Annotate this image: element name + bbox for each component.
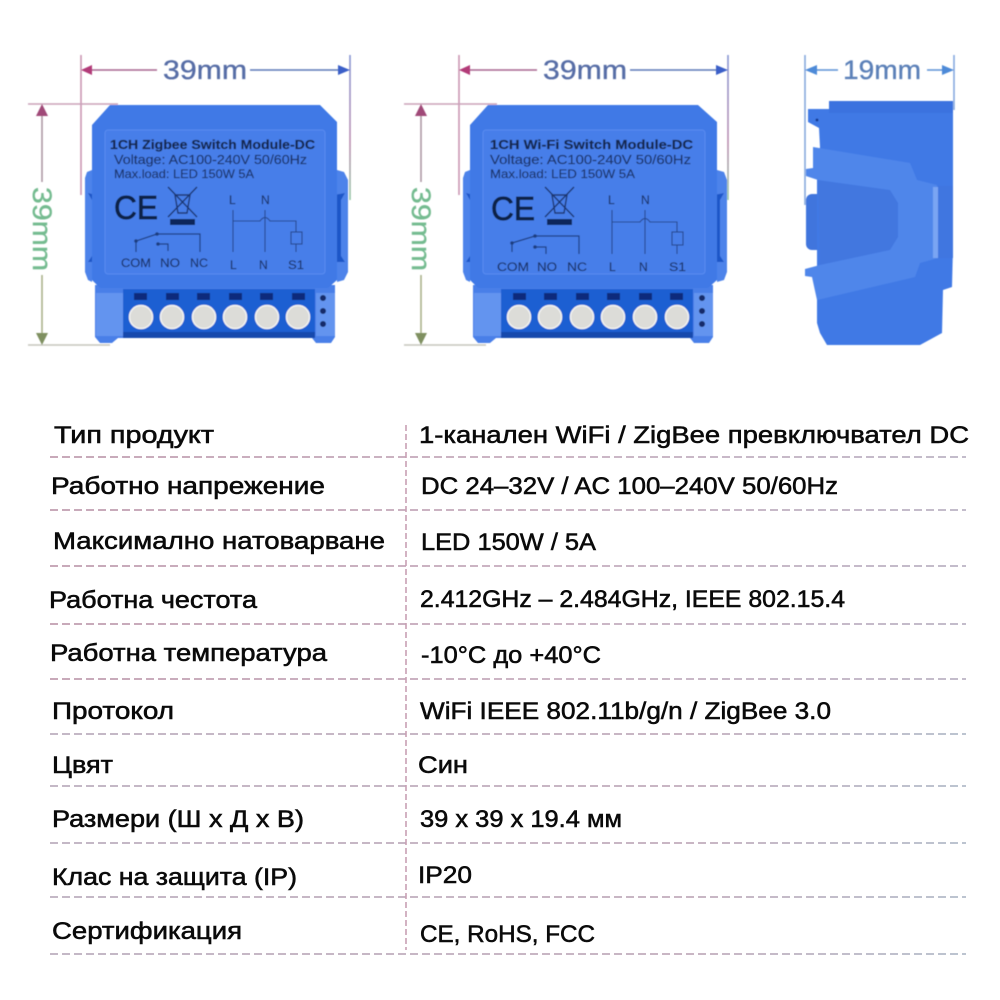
dimension: height 39mm xyxy=(404,104,497,345)
dimension: width 39mm xyxy=(81,55,350,200)
wiring labels: N xyxy=(641,193,650,207)
housing top edge xyxy=(829,101,953,113)
table row: operating frequency xyxy=(49,586,845,614)
label max load: Max.load: LED 150W 5A xyxy=(490,167,635,181)
relay labels xyxy=(497,260,587,274)
wiring labels: L xyxy=(609,260,616,274)
relay labels: COM xyxy=(121,256,151,270)
wiring labels: S1 xyxy=(288,258,304,272)
table row: product type xyxy=(54,422,969,449)
relay labels: NO xyxy=(537,260,557,274)
panel: Zigbee module front view with dimensions xyxy=(27,55,350,345)
value: Син xyxy=(418,752,468,779)
terminal block xyxy=(473,285,713,343)
housing xyxy=(808,101,953,345)
value: CE, RoHS, FCC xyxy=(420,921,595,948)
wiring labels: S1 xyxy=(669,260,686,274)
wiring labels xyxy=(229,193,304,272)
label title: 1CH Zigbee Switch Module-DC xyxy=(110,138,315,152)
table row: maximum load xyxy=(53,528,596,556)
dimension: width 39mm: 39mm xyxy=(543,55,627,85)
wiring labels: N xyxy=(639,260,648,274)
value: IP20 xyxy=(418,862,472,889)
wiring labels xyxy=(608,193,686,274)
icon: CE mark: CE xyxy=(491,190,535,227)
value: 1-канален WiFi / ZigBee превключвател DC xyxy=(419,422,969,449)
round port xyxy=(806,194,824,250)
label: Тип продукт xyxy=(54,422,214,449)
wiring schematic xyxy=(612,210,683,254)
value: -10°C до +40°C xyxy=(421,642,601,669)
relay schematic xyxy=(511,235,579,254)
icon: crossed-out bin xyxy=(168,187,197,225)
table row: colour xyxy=(52,752,468,779)
relay labels xyxy=(121,256,208,270)
dimension: height 39mm: 39mm xyxy=(406,187,436,271)
table row: protocol xyxy=(52,698,831,725)
terminal block xyxy=(95,285,335,343)
value: DC 24–32V / AC 100–240V 50/60Hz xyxy=(421,473,838,500)
wiring labels: N xyxy=(259,258,268,272)
relay schematic xyxy=(135,233,200,252)
wiring labels: L xyxy=(229,193,236,207)
mounting tab dot xyxy=(816,118,818,122)
relay labels: NC xyxy=(190,256,208,270)
label: Работно напрежение xyxy=(51,473,325,500)
icon: CE mark: CE xyxy=(114,189,158,226)
label: Цвят xyxy=(52,752,113,779)
dimension: height 39mm: 39mm xyxy=(27,187,57,271)
label: Максимално натоварване xyxy=(53,528,385,555)
side clips xyxy=(463,170,727,282)
inner window xyxy=(818,180,898,265)
dimension: height 39mm xyxy=(27,104,118,345)
panel: Wi-Fi module front view with dimensions xyxy=(404,55,728,345)
side clips xyxy=(85,170,348,282)
dimension: depth 19mm: 19mm xyxy=(843,55,921,85)
icon: crossed-out bin xyxy=(545,187,574,225)
label: Работна честота xyxy=(49,587,258,614)
rear face xyxy=(938,186,953,258)
table row: protection class xyxy=(52,862,472,891)
value: WiFi IEEE 802.11b/g/n / ZigBee 3.0 xyxy=(420,698,831,725)
label: Клас на защита (IP) xyxy=(52,864,297,891)
label area xyxy=(483,130,705,274)
module body xyxy=(470,105,717,288)
table grid lines xyxy=(50,425,966,954)
relay labels: COM xyxy=(497,260,529,274)
label: Размери (Ш x Д x В) xyxy=(52,806,304,833)
module body xyxy=(92,105,337,288)
dimension: width 39mm: 39mm xyxy=(163,55,247,85)
table row: operating voltage xyxy=(51,473,838,500)
wiring schematic xyxy=(233,210,302,252)
bracket xyxy=(805,147,938,300)
wiring labels: L xyxy=(608,193,615,207)
label area xyxy=(105,130,325,274)
label: Работна температура xyxy=(50,640,328,667)
wiring labels: N xyxy=(261,193,270,207)
label: Протокол xyxy=(52,698,174,725)
table row: certification xyxy=(52,918,595,948)
label title: 1CH Wi-Fi Switch Module-DC xyxy=(490,138,693,152)
value: 2.412GHz – 2.484GHz, IEEE 802.15.4 xyxy=(420,586,845,613)
table row: operating temperature xyxy=(50,640,601,669)
value: LED 150W / 5A xyxy=(421,529,596,556)
label: Сертификация xyxy=(52,918,242,945)
panel: side view with dimension xyxy=(805,55,954,345)
wiring labels: L xyxy=(230,258,237,272)
relay labels: NO xyxy=(160,256,180,270)
dimension: width 39mm xyxy=(459,55,728,200)
bracket highlight xyxy=(933,187,938,258)
label voltage: Voltage: AC100-240V 50/60Hz xyxy=(114,153,307,167)
dimension: depth 19mm xyxy=(805,55,954,205)
table row: dimensions xyxy=(52,806,622,833)
label max load: Max.load: LED 150W 5A xyxy=(114,167,254,181)
relay labels: NC xyxy=(567,260,587,274)
label voltage: Voltage: AC100-240V 50/60Hz xyxy=(490,153,691,167)
value: 39 x 39 x 19.4 мм xyxy=(420,806,622,833)
